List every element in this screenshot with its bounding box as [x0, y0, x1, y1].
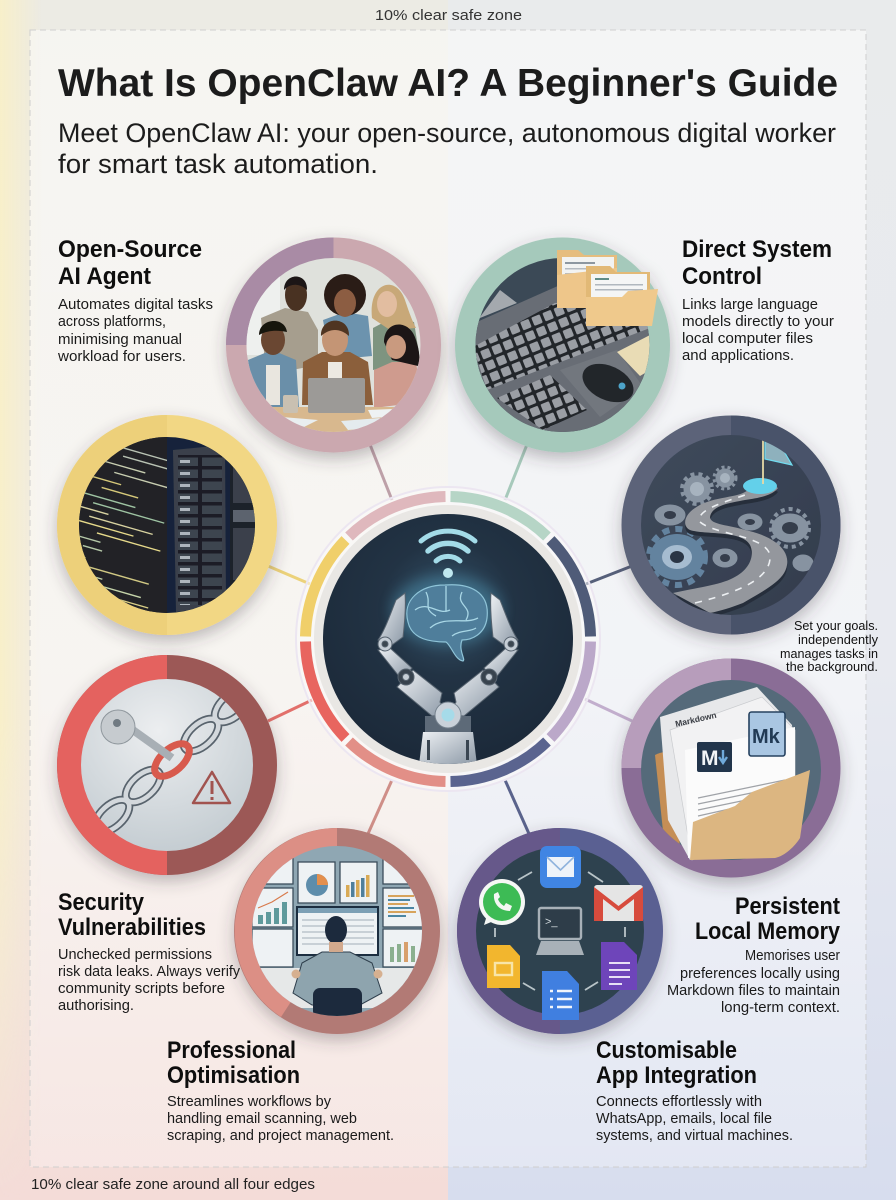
ring: [226, 238, 441, 452]
man with glasses left: [248, 350, 299, 408]
woman centre: [323, 312, 372, 360]
man standing left: [261, 308, 318, 375]
subtitle: for smart task automation.: [58, 149, 378, 179]
woman right: [374, 362, 417, 407]
ring: [234, 828, 440, 1034]
chain: [96, 697, 240, 833]
text block: goals note: [780, 619, 879, 674]
heading: Security: [58, 889, 145, 916]
road: [673, 484, 787, 617]
body: Markdown files to maintain: [667, 983, 840, 999]
papers: [284, 417, 318, 427]
text block: goals note: manages tasks in: [780, 647, 878, 661]
heading: [596, 1037, 757, 1089]
circle: Customisable App Integration, app icons: [457, 828, 663, 1034]
illustration: winding road, gears and flag: [649, 440, 813, 617]
illustration: keyboard, mouse, notebook: [476, 286, 650, 432]
circle: Professional Optimisation, analyst with monitors: [234, 828, 440, 1034]
table: [272, 407, 394, 432]
heading: Local Memory: [695, 918, 841, 945]
icon: WhatsApp: [479, 879, 525, 925]
body: authorising.: [58, 998, 134, 1014]
icon: brain: [407, 585, 487, 661]
text block: goals note: the background.: [786, 660, 878, 674]
body: Links large language: [682, 297, 818, 313]
icon: terminal laptop: >_: [545, 916, 558, 928]
body: Connects effortlessly with: [596, 1094, 762, 1110]
body: long-term context.: [721, 1000, 840, 1016]
body: Streamlines workflows by: [167, 1094, 332, 1110]
text block: Persistent Local Memory: [667, 893, 841, 1016]
big gear: [650, 534, 704, 580]
body: and applications.: [682, 348, 794, 364]
illustration: monitors and person: [252, 858, 424, 1018]
icon: M markdown badge: [697, 742, 732, 772]
chart: bars: [346, 875, 370, 897]
icon: folder front: [690, 770, 810, 860]
heading: AI Agent: [58, 263, 151, 290]
text block: goals note: Set your goals.: [794, 619, 878, 633]
icon: left claw: [378, 593, 448, 716]
chart: pie: [306, 874, 328, 896]
hub inner disc: [314, 505, 582, 773]
icon: mail: [540, 846, 581, 888]
body: [682, 297, 834, 364]
heading: App Integration: [596, 1062, 757, 1089]
body: minimising manual: [58, 332, 182, 348]
ring: [57, 655, 277, 875]
body: Automates digital tasks: [58, 297, 213, 313]
icon: terminal laptop: [536, 908, 584, 955]
flag base: [743, 478, 777, 494]
icon: key: [130, 728, 172, 758]
illustration: team around a laptop: [246, 274, 420, 432]
heading: [167, 1037, 300, 1089]
heading: Vulnerabilities: [58, 914, 206, 941]
subtitle: Meet OpenClaw AI: your open-source, autonomous digital worker: [58, 118, 836, 148]
icon: flag: [762, 440, 764, 484]
cup: [283, 395, 298, 413]
body: WhatsApp, emails, local file: [596, 1111, 772, 1127]
icon: wifi: [421, 531, 475, 578]
illustration: key, chain, warning: [96, 697, 240, 833]
body: handling email scanning, web: [167, 1111, 357, 1127]
man centre with jacket: [302, 352, 373, 405]
heading: Direct System: [682, 236, 832, 263]
gears: [655, 467, 813, 571]
circle: Direct System Control, keyboard and folders: [455, 238, 670, 452]
ring: [455, 238, 670, 452]
icon: Forms: [601, 942, 637, 990]
body: systems, and virtual machines.: [596, 1128, 793, 1144]
body: local computer files: [682, 331, 813, 347]
body: [58, 947, 241, 1014]
heading: Customisable: [596, 1037, 737, 1064]
text block: Direct System Control: [682, 236, 834, 364]
laptop: [308, 378, 365, 413]
blonde woman: [373, 318, 420, 370]
icon: warning triangle: [193, 772, 230, 803]
circle: Security Vulnerabilities, broken chain: [57, 655, 277, 875]
ring: [57, 415, 277, 635]
body: models directly to your: [682, 314, 834, 330]
subtitle: [58, 118, 836, 179]
connector lines: [268, 442, 632, 836]
body: [167, 1094, 394, 1144]
text block: Professional Optimisation: [167, 1037, 394, 1144]
body: community scripts before: [58, 981, 225, 997]
body: Memorises user: [745, 948, 840, 964]
icon: right claw: [448, 593, 518, 716]
text block: goals note: independently: [798, 633, 879, 647]
heading: [695, 893, 841, 945]
icon: Mk badge: [749, 712, 785, 756]
body: [596, 1094, 793, 1144]
heading: Professional: [167, 1037, 296, 1064]
icon: Gmail: [594, 885, 643, 921]
circle: Goal roadmap with gears: [622, 416, 840, 634]
heading: [58, 236, 202, 290]
illustration: code editor and server rack: [79, 437, 255, 613]
body: workload for users.: [57, 349, 186, 365]
broken red link: [151, 740, 193, 780]
heading: Optimisation: [167, 1062, 300, 1089]
label: Markdown: Markdown: [674, 710, 717, 729]
ring: [622, 416, 840, 634]
body: across platforms,: [58, 314, 166, 330]
icon: Docs: [542, 971, 579, 1020]
text block: Customisable App Integration: [596, 1037, 793, 1144]
body: [667, 948, 840, 1016]
icon: Mk badge: Mk: [752, 726, 781, 748]
icon: Slides: [487, 945, 520, 988]
safe zone label: top: 10% clear safe zone: [375, 7, 522, 24]
person: [293, 952, 382, 1005]
heading: [58, 889, 206, 941]
hub halo: [296, 487, 600, 791]
heading: Control: [682, 263, 762, 290]
hub colour ring: [306, 496, 590, 782]
circle: Persistent Local Memory, markdown folder: [622, 658, 840, 878]
icon: brain glow: [392, 575, 502, 645]
ring: [622, 658, 840, 878]
icon: M markdown badge: M: [701, 747, 718, 770]
body: risk data leaks. Always verify: [58, 964, 241, 980]
illustration: markdown papers in a folder: [655, 752, 680, 850]
body: preferences locally using: [680, 966, 840, 982]
heading: Persistent: [735, 893, 840, 920]
body: Unchecked permissions: [58, 947, 212, 963]
heading: [682, 236, 832, 290]
circle: Autonomous code and server: [52, 415, 277, 635]
dashed orbit: [495, 872, 625, 990]
body: scraping, and project management.: [167, 1128, 394, 1144]
safe zone label: bottom: 10% clear safe zone around all four edges: [31, 1176, 315, 1193]
icon: folders: [557, 250, 658, 326]
icon: robot arm base: [419, 702, 477, 765]
ring: [457, 828, 663, 1034]
heading: Open-Source: [58, 236, 202, 263]
text block: Security Vulnerabilities: [58, 889, 241, 1014]
circle: Open-Source AI Agent, team photo: [226, 238, 441, 452]
text block: Open-Source AI Agent: [57, 236, 213, 365]
central hub: robot claw holding brain: [296, 487, 600, 791]
title: What Is OpenClaw AI? A Beginner's Guide: [58, 62, 838, 105]
body: [57, 297, 213, 365]
